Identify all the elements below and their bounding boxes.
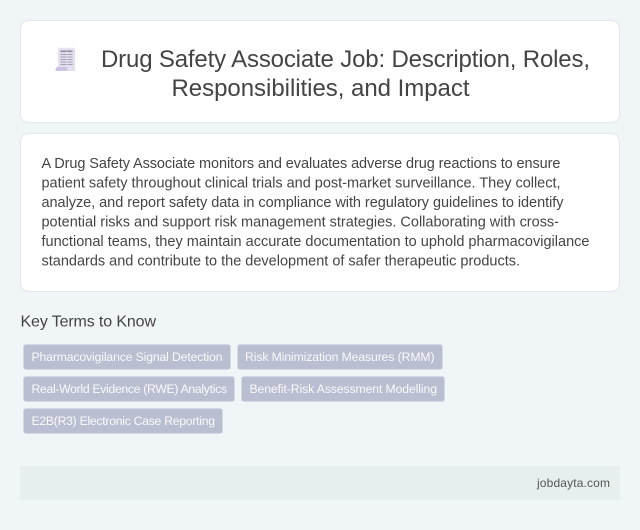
title: Responsibilities, and Impact: [172, 75, 470, 102]
tag: e2b reporting: [24, 408, 222, 434]
tag: signal detection: Pharmacovigilance Signal Detection: [32, 350, 222, 364]
text block: description: patient safety throughout clinical trials and post-market surveillance. They collect,: [42, 176, 560, 192]
text block: description: standards and contribute to the development of safer therapeutic products.: [42, 254, 520, 270]
text block: description: [42, 156, 590, 270]
title: Drug Safety Associate Job: Description, Roles,: [101, 46, 590, 73]
footer: [20, 466, 620, 500]
tag: signal detection: [24, 344, 230, 370]
tag: risk minimization: Risk Minimization Measures (RMM): [245, 350, 434, 364]
text block: description: analyze, and report safety data in compliance with regulatory guidelines to identify: [42, 195, 564, 211]
tag: benefit-risk: Benefit-Risk Assessment Modelling: [250, 382, 437, 396]
text block: description: A Drug Safety Associate monitors and evaluates adverse drug reactions to ensure: [42, 156, 560, 172]
tag: benefit-risk: [242, 376, 444, 402]
icon: document scroll: [56, 48, 75, 71]
text block: description: functional teams, they maintain accurate documentation to uphold pharmacovigilance: [42, 234, 590, 250]
tag: risk minimization: [238, 344, 442, 370]
tag list: [24, 344, 444, 434]
text block: description: potential risks and support risk management strategies. Collaborating with cross-: [42, 214, 559, 230]
tag: e2b reporting: E2B(R3) Electronic Case Reporting: [32, 414, 215, 428]
heading: key terms: Key Terms to Know: [20, 314, 156, 330]
footer source text: jobdayta.com: [536, 476, 610, 490]
tag: real-world evidence: [24, 376, 234, 402]
panel: header: [20, 20, 620, 122]
panel: description: [20, 134, 620, 292]
title: [101, 46, 590, 102]
tag: real-world evidence: Real-World Evidence (RWE) Analytics: [32, 382, 227, 396]
